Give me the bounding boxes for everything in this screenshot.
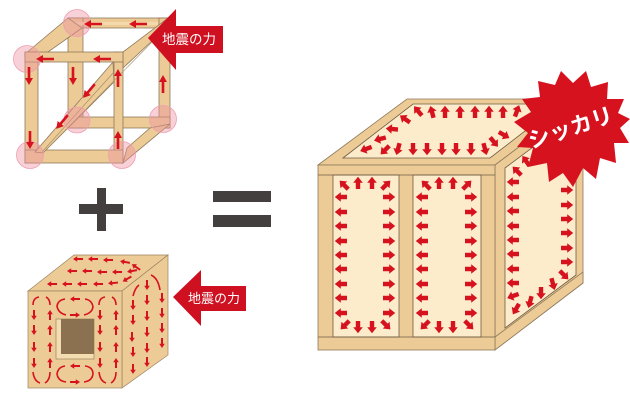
diagonal brace [35, 37, 157, 153]
force arrows in frame [25, 20, 167, 149]
callout arrow: seismic force, bottom: 地震の力 [188, 291, 240, 306]
diagram: panel box with hole [28, 255, 246, 388]
front frame [25, 52, 123, 163]
plus sign [79, 188, 123, 231]
force arrows: front left panel [335, 177, 395, 333]
starburst badge [514, 71, 630, 187]
equals sign [213, 191, 271, 227]
diagram: timber frame cube [14, 9, 223, 168]
back frame [68, 18, 170, 128]
box faces [28, 255, 168, 388]
side face [495, 99, 583, 350]
diagram: reinforced timber box [318, 71, 630, 350]
force arrows: side panel [506, 153, 573, 317]
force arrows: front right panel [416, 177, 477, 333]
top face [318, 99, 583, 165]
callout arrow: seismic force, top [148, 9, 223, 70]
force arrows: top panel [359, 103, 524, 158]
joint highlights [14, 10, 176, 168]
callout arrow: seismic force, top: 地震の力 [162, 32, 216, 47]
force arrows on side face [129, 275, 165, 374]
window opening [56, 319, 94, 359]
force arrows on top face [47, 256, 142, 287]
callout arrow: seismic force, bottom [173, 270, 246, 326]
force arrows on front face [31, 296, 119, 385]
depth beams [25, 18, 170, 163]
front frame [318, 165, 495, 350]
starburst badge: シッカリ [525, 102, 616, 153]
